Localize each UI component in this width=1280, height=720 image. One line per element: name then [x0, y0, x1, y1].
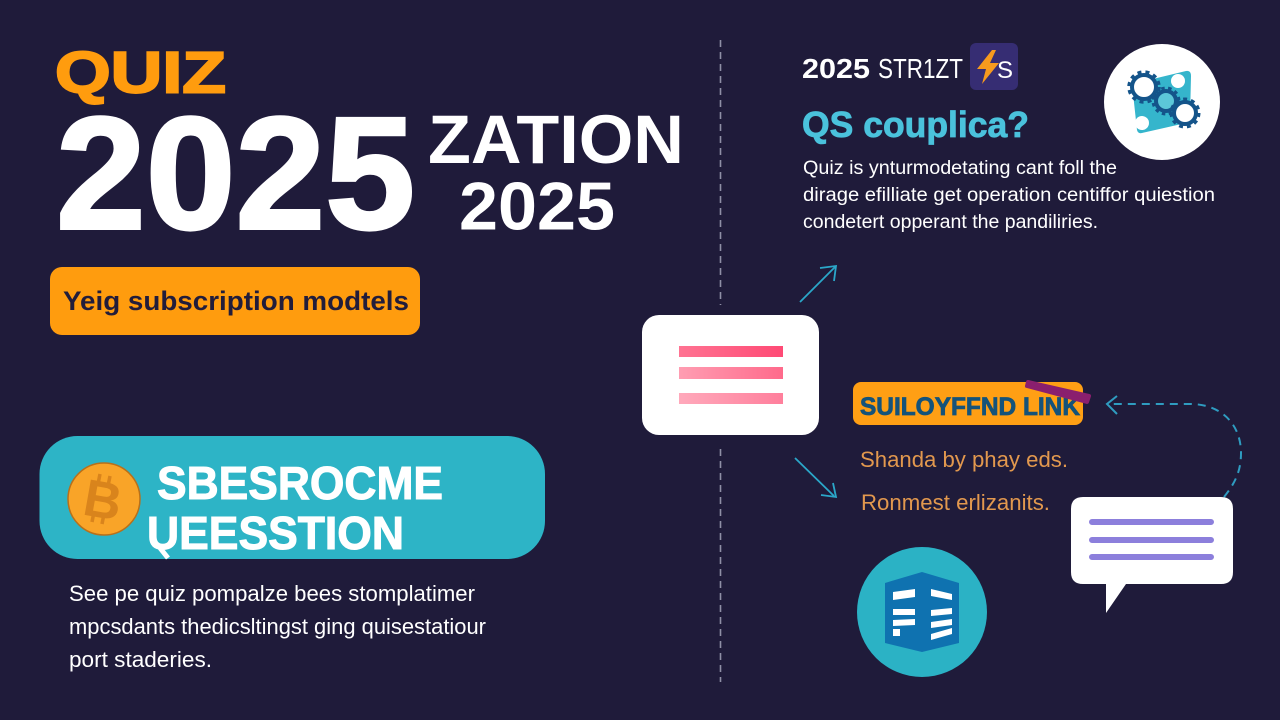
text block: orange notes [860, 447, 1068, 515]
icon: document circle [857, 547, 987, 677]
text block: quiz explanation: condetert opperant the pandiliries. [803, 212, 1098, 233]
text block: orange notes: Ronmest erlizanits. [861, 490, 1050, 515]
panel: question banner: UEESSTION [147, 507, 404, 559]
text block: quiz explanation: dirage efilliate get operation centiffor quiestion [803, 185, 1215, 206]
label: orange link tag: SUILOYFFND LINK [860, 393, 1080, 421]
heading: QS couplica: QS couplica? [802, 104, 1029, 145]
panel: central menu card [642, 315, 819, 435]
subscription badge: Yeig subscription modtels [63, 286, 409, 316]
panel: question banner [40, 436, 545, 559]
title block [55, 40, 684, 262]
text block: orange notes: Shanda by phay eds. [860, 447, 1068, 472]
heading: small 2025: 2025 [459, 168, 615, 244]
subscription badge [50, 267, 420, 335]
text block: quiz description [69, 581, 486, 672]
heading: ZATION: ZATION [428, 101, 684, 178]
arrow: up right [800, 266, 836, 302]
label: orange link tag [853, 382, 1089, 425]
icon: lightning badge: S [997, 57, 1013, 84]
icon: bitcoin coin: B [79, 469, 126, 533]
text block: quiz explanation: Quiz is ynturmodetating cant foll the [803, 158, 1117, 179]
icon: gears circle [1104, 44, 1220, 160]
top-right header [802, 43, 1018, 90]
text block: quiz description: See pe quiz pompalze bees stomplatimer [69, 581, 475, 606]
heading: QUIZ: QUIZ [55, 40, 226, 106]
arrow: dashed curve to link tag [1107, 396, 1241, 497]
text block: quiz description: mpcsdants thedicsltingst ging quisestatiour [69, 614, 486, 639]
banner heading: SBESROCME [157, 457, 443, 509]
icon: bitcoin coin [68, 463, 140, 535]
icon: lightning badge [970, 43, 1018, 90]
top-right header: 2025 [802, 53, 870, 84]
icon: speech bubble [1071, 497, 1233, 613]
arrow: down right [795, 458, 836, 497]
heading: large 2025: 2025 [56, 84, 415, 262]
top-right header: STR1ZT [878, 53, 963, 84]
text block: quiz explanation [803, 158, 1215, 233]
text block: quiz description: port staderies. [69, 647, 212, 672]
